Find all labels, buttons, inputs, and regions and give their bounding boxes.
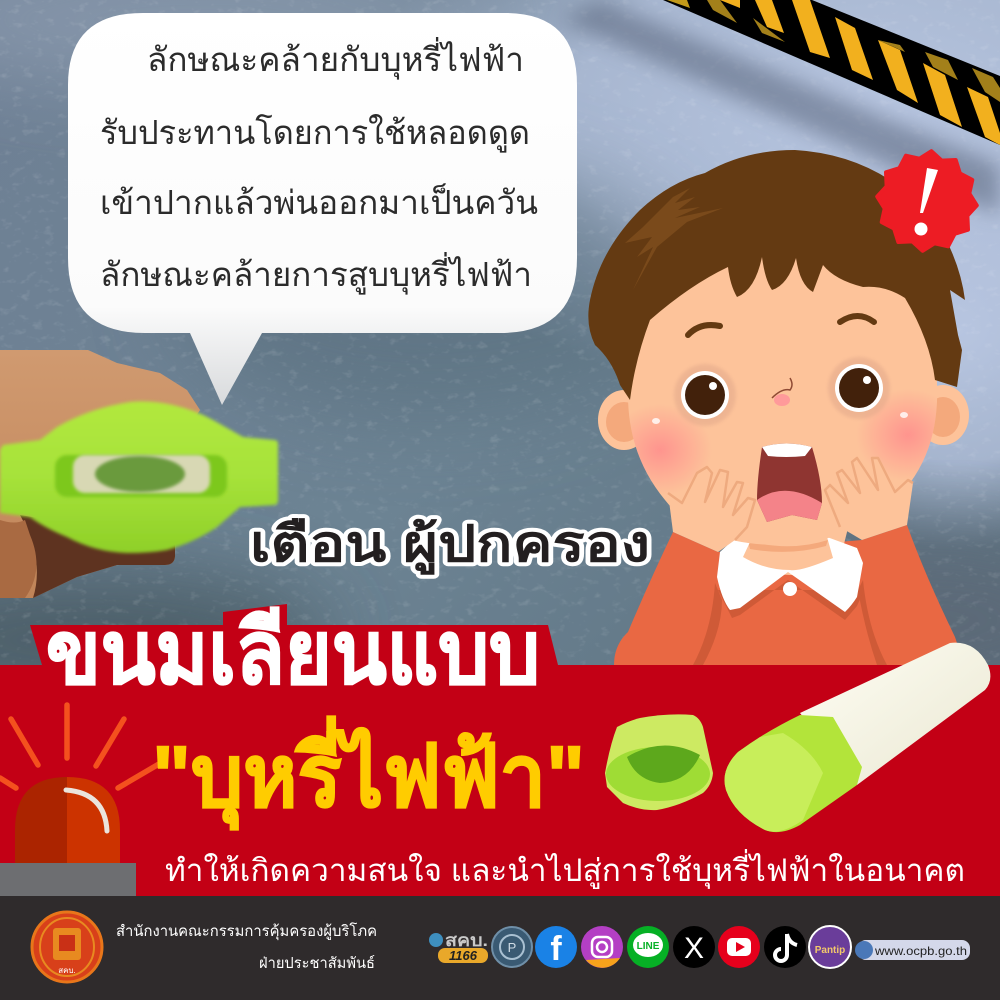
TikTok icon bbox=[764, 926, 806, 968]
nose bbox=[772, 378, 792, 406]
department name: ฝ่ายประชาสัมพันธ์ bbox=[259, 955, 375, 972]
boy illustration bbox=[588, 150, 969, 665]
footer bar bbox=[0, 896, 1000, 1000]
Pantip icon bbox=[809, 926, 851, 968]
bubble text line 1: ลักษณะคล้ายกับบุหรี่ไฟฟ้า bbox=[147, 37, 524, 80]
siren rays bbox=[0, 705, 164, 788]
siren dome bbox=[15, 777, 67, 863]
left ear bbox=[598, 390, 650, 450]
website link bbox=[855, 940, 970, 960]
mouth bbox=[757, 444, 822, 522]
bubble text line 4: ลักษณะคล้ายการสูบบุหรี่ไฟฟ้า bbox=[100, 252, 532, 295]
siren base bbox=[0, 863, 136, 896]
organisation name: สำนักงานคณะกรรมการคุ้มครองผู้บริโภค bbox=[116, 922, 377, 941]
X icon: X bbox=[684, 932, 704, 965]
hotline logo bbox=[429, 931, 488, 963]
LINE icon: LINE bbox=[637, 941, 660, 952]
OCPB icon: P bbox=[508, 940, 516, 955]
OCPB icon bbox=[492, 927, 532, 967]
right hand bbox=[825, 458, 913, 540]
photo: candy tube bbox=[724, 643, 990, 832]
warning heading: parents: เตือน ผู้ปกครอง bbox=[250, 516, 650, 575]
shirt button bbox=[783, 582, 797, 596]
Facebook icon: f bbox=[550, 930, 562, 968]
left hand bbox=[668, 467, 755, 552]
bubble text line 3: เข้าปากแล้วพ่นออกมาเป็นควัน bbox=[100, 183, 538, 221]
boy collar bbox=[717, 537, 863, 612]
boy hair bbox=[588, 150, 965, 400]
Instagram icon bbox=[581, 926, 623, 968]
siren icon bbox=[0, 705, 164, 896]
Facebook icon bbox=[535, 926, 577, 968]
main title: imitation candy: ขนมเลียนแบบ bbox=[46, 603, 540, 702]
bubble text line 2: รับประทานโดยการใช้หลอดดูด bbox=[100, 114, 530, 153]
right ear bbox=[917, 385, 969, 445]
X icon bbox=[673, 926, 715, 968]
organisation emblem bbox=[32, 912, 102, 982]
YouTube icon bbox=[718, 926, 760, 968]
hotline logo: สคบ. bbox=[445, 931, 488, 950]
cheek blush bbox=[630, 397, 936, 488]
right eyebrow bbox=[840, 316, 874, 322]
left eyebrow bbox=[688, 325, 720, 335]
boy body and shirt bbox=[614, 525, 960, 665]
photo: hand holding green candy bbox=[0, 350, 278, 598]
Pantip icon: Pantip bbox=[815, 945, 845, 956]
subtitle: ทำให้เกิดความสนใจ และนำไปสู่การใช้บุหรี่ไฟฟ้าในอนาคต bbox=[165, 849, 965, 890]
caution tape bbox=[560, 0, 1000, 215]
red banner bbox=[0, 604, 1000, 896]
organisation emblem: สคบ. bbox=[58, 966, 76, 975]
main title: e-cigarette: "บุหรี่ไฟฟ้า" bbox=[152, 715, 585, 830]
hotline logo: 1166 bbox=[449, 948, 478, 963]
right eye bbox=[828, 357, 890, 419]
website link: www.ocpb.go.th bbox=[874, 944, 967, 958]
warning badge bbox=[877, 151, 977, 251]
LINE icon bbox=[627, 926, 669, 968]
speech bubble bbox=[68, 13, 577, 405]
boy head bbox=[628, 225, 937, 545]
left eye bbox=[674, 364, 736, 426]
photo: candy cap bbox=[605, 714, 713, 810]
boy neck bbox=[735, 520, 850, 575]
